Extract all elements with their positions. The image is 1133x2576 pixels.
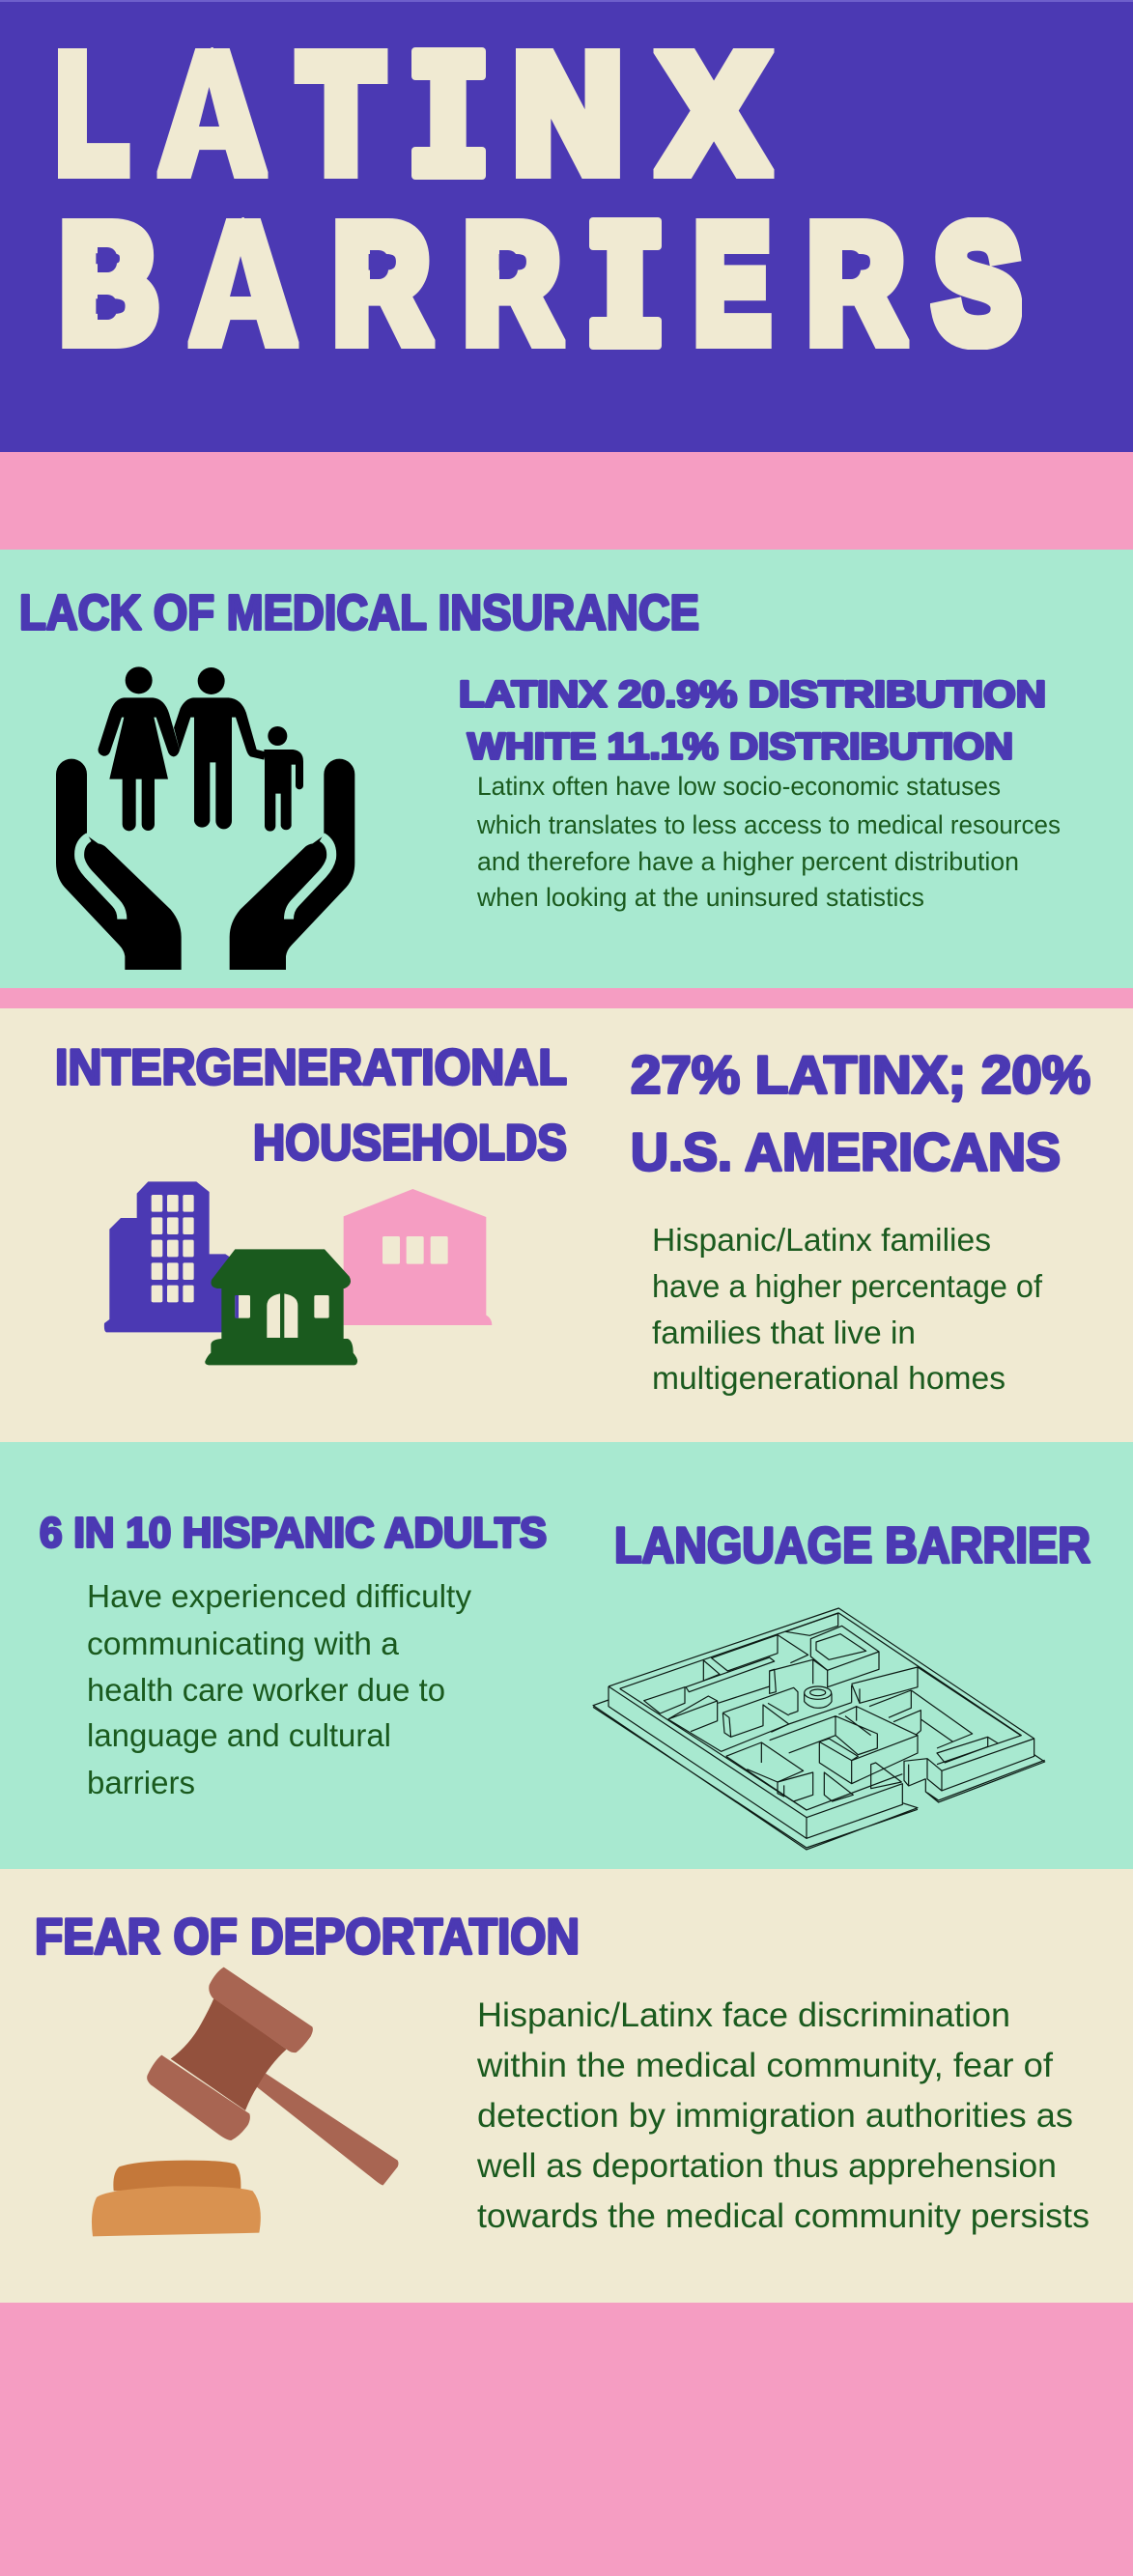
stat: latinx distribution: LATINX 20.9% DISTRIBUTION: [459, 674, 1046, 715]
stat: 27% latinx 20% us americans: [631, 1045, 1091, 1182]
text block: language explanation: barriers: [87, 1765, 195, 1800]
icon: houses: [104, 1181, 492, 1365]
pink house: [344, 1189, 492, 1325]
text block: multigenerational explanation: [652, 1222, 1043, 1396]
text block: deportation explanation: well as deportation thus apprehension: [476, 2147, 1057, 2185]
text block: insurance explanation: and therefore have a higher percent distribution: [477, 847, 1019, 876]
heading: intergenerational households: [55, 1039, 567, 1171]
pink band under title: [0, 452, 1133, 550]
purple apartment tower: [104, 1181, 230, 1332]
heading: lack of medical insurance: LACK OF MEDICAL INSURANCE: [19, 585, 699, 639]
panel: language barrier: [0, 1442, 1133, 1869]
panel: intergenerational households: [0, 1008, 1133, 1442]
text block: language explanation: communicating with a: [87, 1626, 400, 1661]
text block: insurance explanation: Latinx often have low socio-economic statuses: [477, 772, 1001, 801]
text block: multigenerational explanation: families that live in: [652, 1315, 916, 1350]
text block: language explanation: [87, 1578, 472, 1800]
title line: LATINX: [58, 47, 775, 180]
text block: multigenerational explanation: have a higher percentage of: [652, 1268, 1043, 1304]
pink divider band: [0, 988, 1133, 1008]
text block: deportation explanation: detection by immigration authorities as: [477, 2097, 1073, 2135]
text block: deportation explanation: [476, 1996, 1090, 2235]
text block: multigenerational explanation: Hispanic/Latinx families: [652, 1222, 991, 1258]
icon: gavel: [92, 1967, 398, 2236]
title line: BARRIERS: [62, 217, 1022, 350]
heading: intergenerational households: HOUSEHOLDS: [253, 1115, 567, 1171]
text block: language explanation: health care worker due to: [87, 1672, 445, 1708]
panel: title banner: [0, 0, 1133, 452]
pink footer band: [0, 2303, 1133, 2576]
green house: [205, 1249, 357, 1365]
heading: language barrier: LANGUAGE BARRIER: [614, 1518, 1091, 1574]
icon: family held in hands: [56, 666, 354, 970]
text block: insurance explanation: which translates to less access to medical resources: [476, 810, 1061, 839]
text block: language explanation: language and cultural: [87, 1717, 391, 1753]
text block: insurance explanation: when looking at the uninsured statistics: [476, 883, 924, 912]
text block: multigenerational explanation: multigenerational homes: [652, 1360, 1006, 1396]
text block: deportation explanation: within the medical community, fear of: [476, 2047, 1053, 2084]
text block: insurance explanation: [476, 772, 1061, 912]
text block: language explanation: Have experienced difficulty: [87, 1578, 472, 1614]
icon: maze: [593, 1608, 1045, 1850]
heading: fear of deportation: FEAR OF DEPORTATION: [35, 1909, 580, 1965]
text block: deportation explanation: Hispanic/Latinx face discrimination: [477, 1996, 1010, 2034]
stat: 27% latinx 20% us americans: 27% LATINX; 20%: [631, 1045, 1091, 1105]
stat: 6 in 10 hispanic adults: 6 IN 10 HISPANIC ADULTS: [40, 1509, 547, 1557]
stat: white distribution: WHITE 11.1% DISTRIBUTION: [467, 726, 1013, 767]
panel: lack of medical insurance: [0, 550, 1133, 988]
heading: intergenerational households: INTERGENERATIONAL: [55, 1039, 567, 1095]
text block: deportation explanation: towards the medical community persists: [477, 2197, 1090, 2235]
stat: 27% latinx 20% us americans: U.S. AMERICANS: [631, 1122, 1061, 1182]
panel: fear of deportation: [0, 1869, 1133, 2303]
